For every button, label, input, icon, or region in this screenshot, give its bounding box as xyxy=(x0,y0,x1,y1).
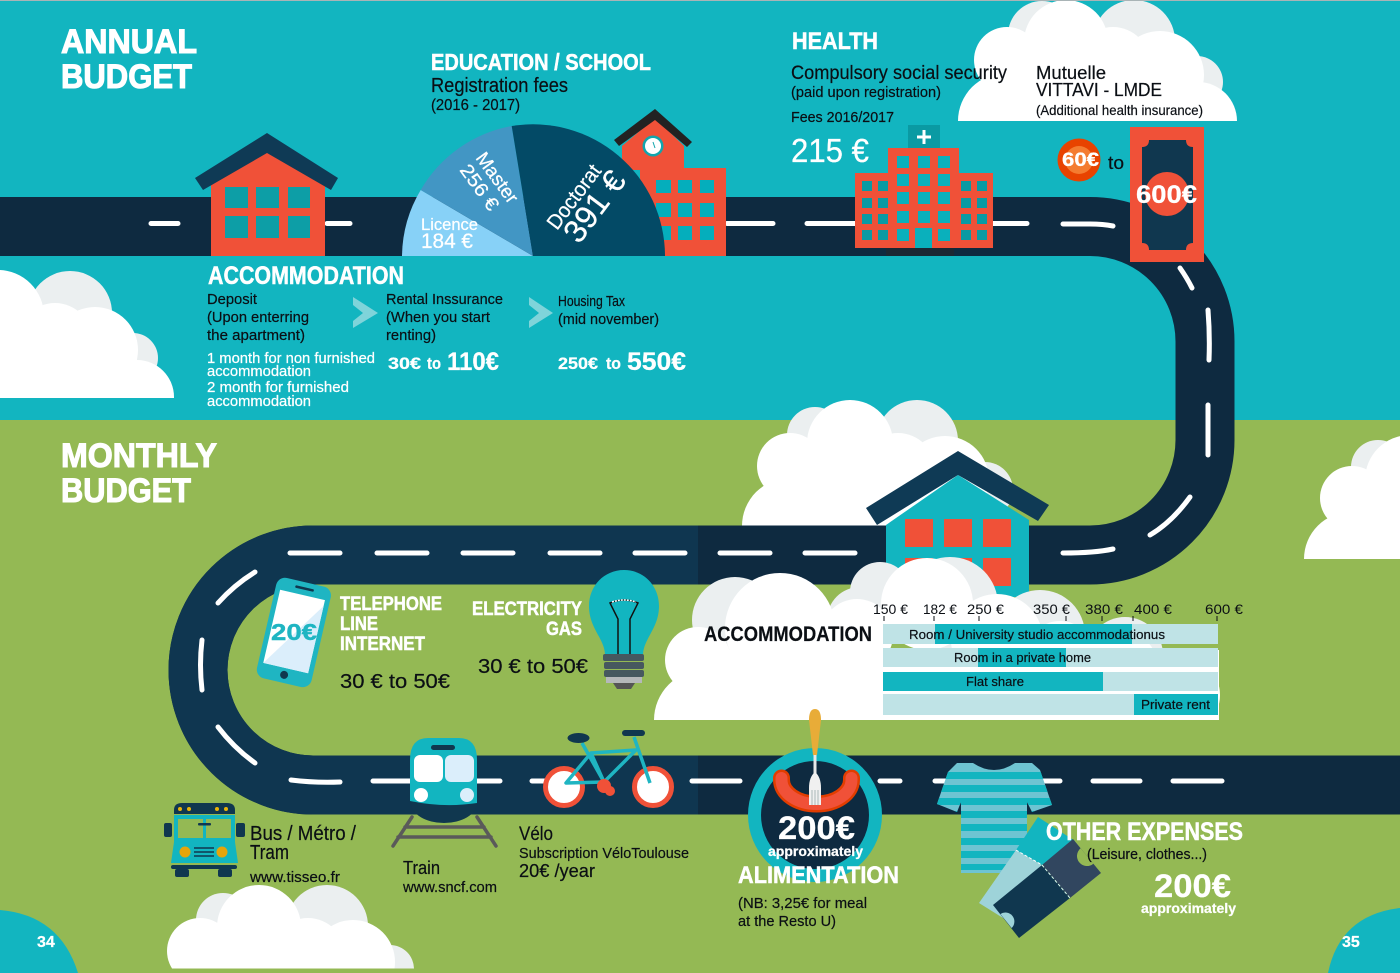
text: rental insurance: renting) xyxy=(386,327,436,344)
icon: banknote 600 euro xyxy=(1130,127,1204,262)
text: telephone: 30 € to 50€ xyxy=(340,671,450,693)
text: electricity: ELECTRICITY xyxy=(472,599,582,620)
text: deposit xyxy=(207,291,375,410)
text: deposit: Deposit xyxy=(207,291,258,308)
title: annual budget xyxy=(61,23,197,96)
heading: accommodation monthly: ACCOMMODATION xyxy=(704,623,872,646)
icon: hospital xyxy=(855,125,993,256)
bar: private rent xyxy=(883,694,1218,715)
text: other expenses: OTHER EXPENSES xyxy=(1046,818,1243,846)
heading: health: Fees 2016/2017 xyxy=(791,109,894,126)
text: other expenses: approximately xyxy=(1141,900,1236,916)
pie chart: registration fees: Doctorat xyxy=(543,160,606,234)
cloud: top right xyxy=(958,1,1237,121)
text: electricity: 30 € to 50€ xyxy=(478,656,588,678)
title: monthly budget: BUDGET xyxy=(61,472,191,510)
icon: plate with sausage and fork: 200€ xyxy=(778,810,855,846)
text: electricity: GAS xyxy=(546,619,582,640)
icon: 60 euro coin xyxy=(1058,138,1100,182)
text: telephone: LINE xyxy=(340,614,378,635)
icon: bicycle xyxy=(546,730,672,806)
axis labels: 400 € xyxy=(1134,601,1172,617)
text: velo: Subscription VéloToulouse xyxy=(519,845,689,862)
text: housing tax: to xyxy=(606,354,621,373)
icon: plate with sausage and fork xyxy=(748,709,882,882)
text: train: www.sncf.com xyxy=(402,879,497,896)
text: velo xyxy=(519,824,689,881)
bar: room / university studio: Room / University studio accommodationus xyxy=(909,627,1166,642)
background: annual section xyxy=(0,0,1400,420)
icon: train xyxy=(393,738,496,846)
bar: room in a private home: Room in a private home xyxy=(954,650,1091,665)
pie chart: registration fees: Licence xyxy=(421,215,478,234)
heading: health: HEALTH xyxy=(792,28,878,55)
text: alimentation: (NB: 3,25€ for meal xyxy=(738,895,867,912)
page number: 34: 34 xyxy=(37,934,55,951)
arrow: insurance to tax xyxy=(529,297,553,328)
title: annual budget: BUDGET xyxy=(61,58,192,96)
axis labels: 150 € xyxy=(873,601,908,617)
text: housing tax: 250€ xyxy=(558,354,599,373)
text: alimentation: ALIMENTATION xyxy=(738,862,899,889)
icon: tickets xyxy=(979,817,1101,938)
bar: room / university studio xyxy=(883,624,1218,644)
text: housing tax: Housing Tax xyxy=(558,293,625,310)
text: train: Train xyxy=(403,858,440,878)
bar: flat share xyxy=(883,672,1218,691)
heading: education / school: EDUCATION / SCHOOL xyxy=(431,49,651,75)
pie chart: registration fees: 184 € xyxy=(421,230,473,253)
text: housing tax: (mid november) xyxy=(558,311,659,328)
text: to: to xyxy=(1108,153,1124,173)
icon: phone: 20€ xyxy=(271,619,317,645)
background: monthly section xyxy=(0,420,1400,973)
axis labels: 600 € xyxy=(1205,601,1243,617)
pie chart: registration fees: Master xyxy=(471,149,522,208)
heading: health: Compulsory social security xyxy=(791,63,1007,84)
text: rental insurance: to xyxy=(427,354,441,373)
heading: health: 215 € xyxy=(791,132,869,169)
axis labels xyxy=(873,601,1243,621)
heading: education / school: Registration fees xyxy=(431,75,568,97)
text: deposit: accommodation xyxy=(207,393,311,410)
text: mutuelle: (Additional health insurance) xyxy=(1036,102,1203,118)
text: bus: www.tisseo.fr xyxy=(249,869,340,886)
chart: accommodation price ranges xyxy=(873,601,1243,715)
text: bus: Bus / Métro / xyxy=(250,823,356,845)
axis labels: 250 € xyxy=(967,601,1004,617)
text: train xyxy=(402,858,497,896)
text: velo: Vélo xyxy=(519,824,553,845)
icon: monthly house xyxy=(866,451,1049,597)
text: alimentation: at the Resto U) xyxy=(738,913,836,930)
cloud: monthly accommodation xyxy=(654,557,1220,720)
bar: flat share: Flat share xyxy=(966,674,1024,689)
heading: education / school: (2016 - 2017) xyxy=(431,97,520,114)
title: annual budget: ANNUAL xyxy=(61,23,197,61)
axis labels: 380 € xyxy=(1085,601,1123,617)
pie chart: registration fees xyxy=(402,124,665,256)
icon: house on annual road xyxy=(195,133,338,256)
icon: school building xyxy=(614,109,726,256)
icon: phone xyxy=(255,576,333,689)
cloud: right of monthly section xyxy=(1304,436,1400,559)
text: velo: 20€ /year xyxy=(519,861,595,881)
cloud: bottom xyxy=(167,885,414,973)
text: rental insurance: Rental Inssurance xyxy=(386,291,503,308)
text: other expenses xyxy=(1046,818,1243,916)
text: rental insurance: (When you start xyxy=(386,309,491,326)
text: telephone xyxy=(340,594,450,693)
icon: 60 euro coin: 60€ xyxy=(1062,150,1100,171)
heading: education / school xyxy=(431,49,651,114)
page number: 35: 35 xyxy=(1342,934,1360,951)
text: telephone: TELEPHONE xyxy=(340,594,442,615)
text: rental insurance xyxy=(386,291,503,376)
bar: private rent: Private rent xyxy=(1141,697,1210,712)
icon: banknote 600 euro: 600€ xyxy=(1136,181,1197,209)
text: deposit: the apartment) xyxy=(207,327,305,344)
text: electricity xyxy=(472,599,588,678)
text: deposit: (Upon enterring xyxy=(207,309,309,326)
axis labels: 350 € xyxy=(1033,601,1070,617)
text: housing tax: 550€ xyxy=(627,348,686,376)
text: rental insurance: 110€ xyxy=(447,348,499,376)
text: other expenses: (Leisure, clothes...) xyxy=(1087,846,1207,863)
text: mutuelle: Mutuelle xyxy=(1036,63,1106,83)
text: other expenses: 200€ xyxy=(1154,868,1231,904)
title: monthly budget xyxy=(61,437,217,510)
text: deposit: 1 month for non furnished xyxy=(207,350,375,367)
pie chart: registration fees: 256 € xyxy=(455,161,503,215)
text: telephone: INTERNET xyxy=(340,634,425,655)
text: bus: Tram xyxy=(250,842,289,864)
text: deposit: accommodation xyxy=(207,363,311,380)
text: alimentation xyxy=(738,862,899,930)
arrow: deposit to insurance xyxy=(353,297,378,328)
title: monthly budget: MONTHLY xyxy=(61,437,217,475)
text: mutuelle xyxy=(1036,63,1203,118)
road xyxy=(0,224,1400,785)
heading: accommodation annual: ACCOMMODATION xyxy=(208,262,404,290)
icon: plate with sausage and fork: approximately xyxy=(768,843,863,859)
text: mutuelle: VITTAVI - LMDE xyxy=(1036,80,1162,100)
icon: bus xyxy=(164,803,245,877)
text: bus xyxy=(249,823,356,886)
page number: 34 xyxy=(0,910,78,973)
pie chart: registration fees: 391 € xyxy=(556,163,633,249)
heading: health xyxy=(791,28,1007,169)
text: deposit: 2 month for furnished xyxy=(207,379,349,396)
axis labels: 182 € xyxy=(923,601,957,617)
icon: t-shirt xyxy=(937,763,1052,873)
icon: light bulb xyxy=(589,570,659,689)
heading: health: (paid upon registration) xyxy=(791,84,941,101)
cloud: left of annual section xyxy=(0,270,174,398)
bar: room in a private home xyxy=(883,648,1218,667)
text: housing tax xyxy=(558,293,686,376)
text: rental insurance: 30€ xyxy=(388,354,422,373)
cloud: behind monthly house xyxy=(742,400,1012,526)
page number: 35 xyxy=(1328,908,1400,973)
